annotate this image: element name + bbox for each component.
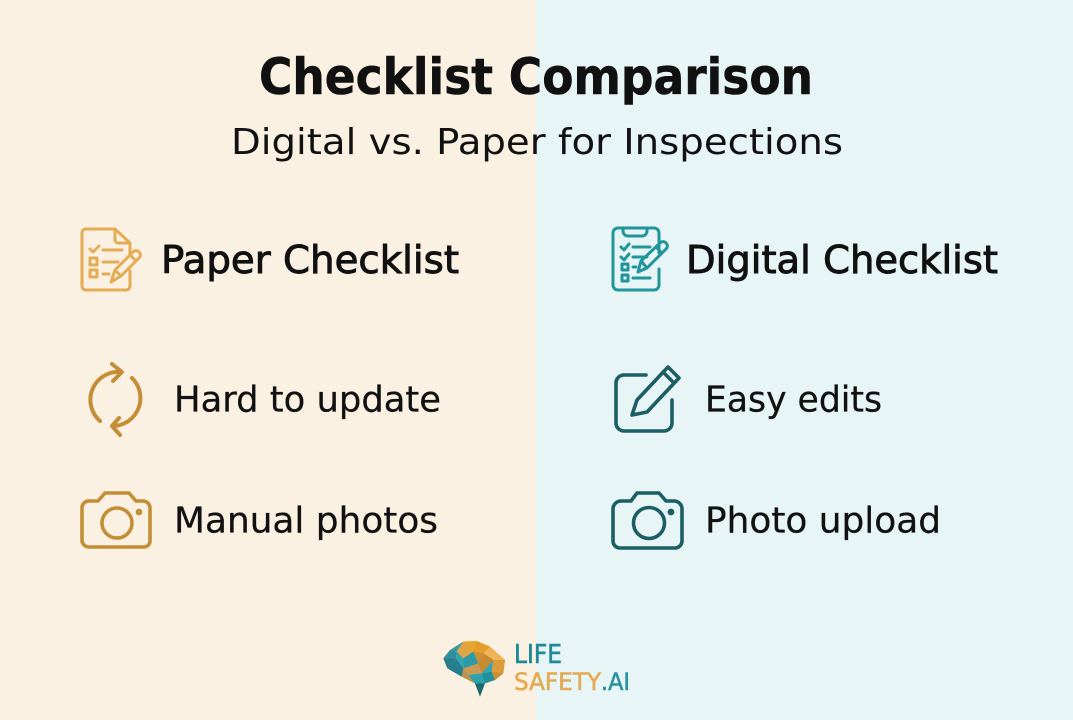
icon: paper camera [82, 493, 150, 547]
heading: digital checklist: Digital Checklist [686, 238, 998, 282]
text: .ai: .AI [601, 668, 630, 696]
icon: refresh arrows [90, 364, 140, 435]
panel: paper background [0, 0, 536, 720]
icon: edit pencil [616, 367, 679, 431]
logo: life safety ai [443, 640, 630, 697]
text: manual photos: Manual photos [174, 500, 438, 542]
icon: digital camera [613, 493, 682, 548]
text: hard to update: Hard to update [174, 380, 441, 420]
icon: digital checklist [613, 228, 667, 290]
text: safety: SAFETY [514, 668, 601, 696]
heading: paper checklist: Paper Checklist [161, 238, 459, 282]
title: Checklist Comparison [259, 48, 813, 106]
icon: polygon brain [443, 641, 505, 697]
subtitle: Digital vs. Paper for Inspections [231, 122, 843, 163]
icon: paper checklist [82, 229, 140, 290]
text: photo upload: Photo upload [705, 500, 941, 542]
text: easy edits: Easy edits [705, 380, 882, 420]
text: life: LIFE [514, 640, 562, 670]
panel: digital background [536, 0, 1073, 720]
